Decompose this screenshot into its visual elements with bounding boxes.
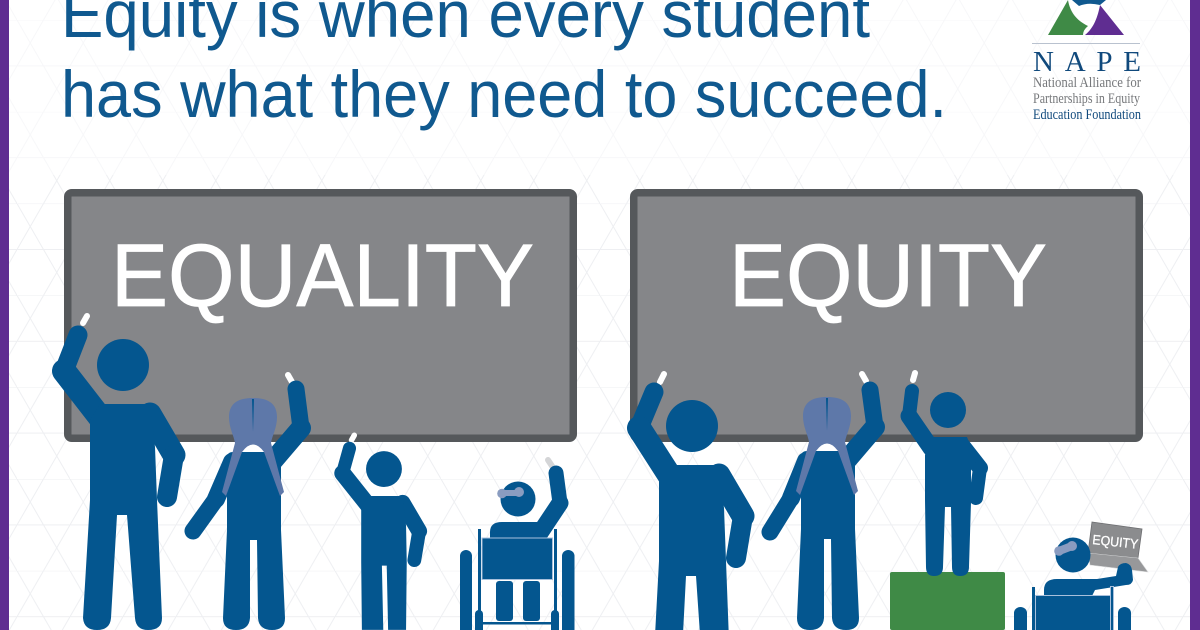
logo mark: [1048, 0, 1124, 35]
panel: equity chalkboard: [634, 193, 1139, 438]
figure: girl with braids, equality: [193, 375, 301, 630]
figure: tall person, equality: [64, 316, 174, 630]
logo caption: Education Foundation: [1033, 107, 1142, 123]
figure: small boy, equality: [343, 435, 419, 630]
title: has what they need to succeed.: [61, 57, 947, 131]
logo caption: National Alliance for: [1033, 75, 1141, 91]
title: [61, 0, 947, 131]
green box: [890, 572, 1005, 630]
logo caption: [1033, 75, 1142, 123]
left purple border: [0, 0, 9, 630]
hair bow: [497, 487, 524, 498]
panel: equality chalkboard: [68, 193, 573, 438]
figure: girl in wheelchair, equality: [460, 460, 574, 630]
logo caption: Partnerships in Equity: [1033, 91, 1141, 107]
figure: tall person, equity: [639, 374, 743, 630]
figure: girl in wheelchair with laptop, equity: [1014, 522, 1148, 630]
logo name: NAPE: [1033, 46, 1141, 78]
hair bow: [1054, 541, 1077, 556]
right purple border: [1190, 0, 1200, 630]
laptop label: EQUITY: [1092, 532, 1139, 552]
heading: equity: EQUITY: [729, 225, 1047, 325]
heading: equality: EQUALITY: [111, 225, 534, 325]
NAPE logo: [1032, 0, 1142, 123]
figure: small boy on box, equity: [909, 373, 980, 576]
figure: girl with braids, equity: [770, 374, 875, 630]
